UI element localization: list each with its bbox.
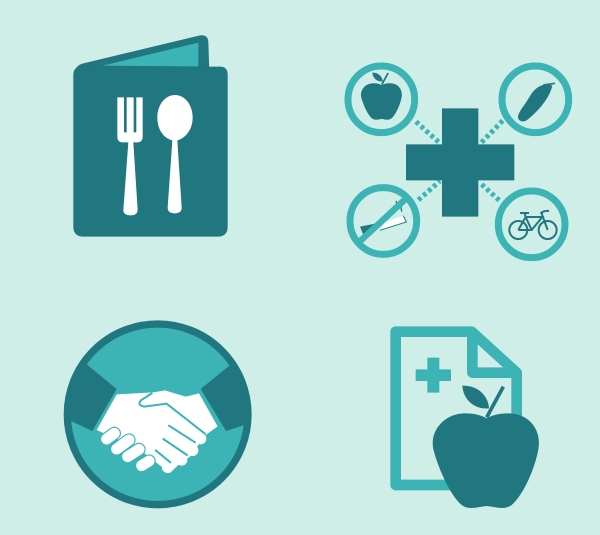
menu inner page bbox=[103, 43, 198, 66]
clasped hands bbox=[97, 390, 218, 473]
icon: handshake in circle bbox=[66, 324, 250, 505]
document outline bbox=[396, 332, 517, 485]
menu front cover bbox=[73, 67, 228, 237]
fork bbox=[117, 97, 143, 215]
apple bbox=[433, 386, 539, 508]
spoon bbox=[157, 95, 193, 213]
document fold bbox=[472, 332, 517, 373]
central cross bbox=[406, 108, 514, 217]
circle: no smoking bbox=[350, 188, 417, 254]
icon: menu with fork and spoon bbox=[73, 35, 228, 237]
circle background bbox=[67, 324, 248, 505]
left sleeve bbox=[66, 364, 117, 431]
dotted connectors bbox=[416, 121, 503, 202]
menu back cover bbox=[73, 35, 209, 82]
circle: apple bbox=[348, 66, 415, 133]
document plus sign bbox=[416, 358, 451, 393]
icon: medical cross with healthy habits bbox=[348, 66, 569, 258]
right sleeve bbox=[201, 366, 250, 431]
circle: vegetable bbox=[502, 66, 569, 133]
icon: medical document with apple bbox=[396, 332, 539, 508]
circle: bicycle bbox=[498, 191, 565, 258]
